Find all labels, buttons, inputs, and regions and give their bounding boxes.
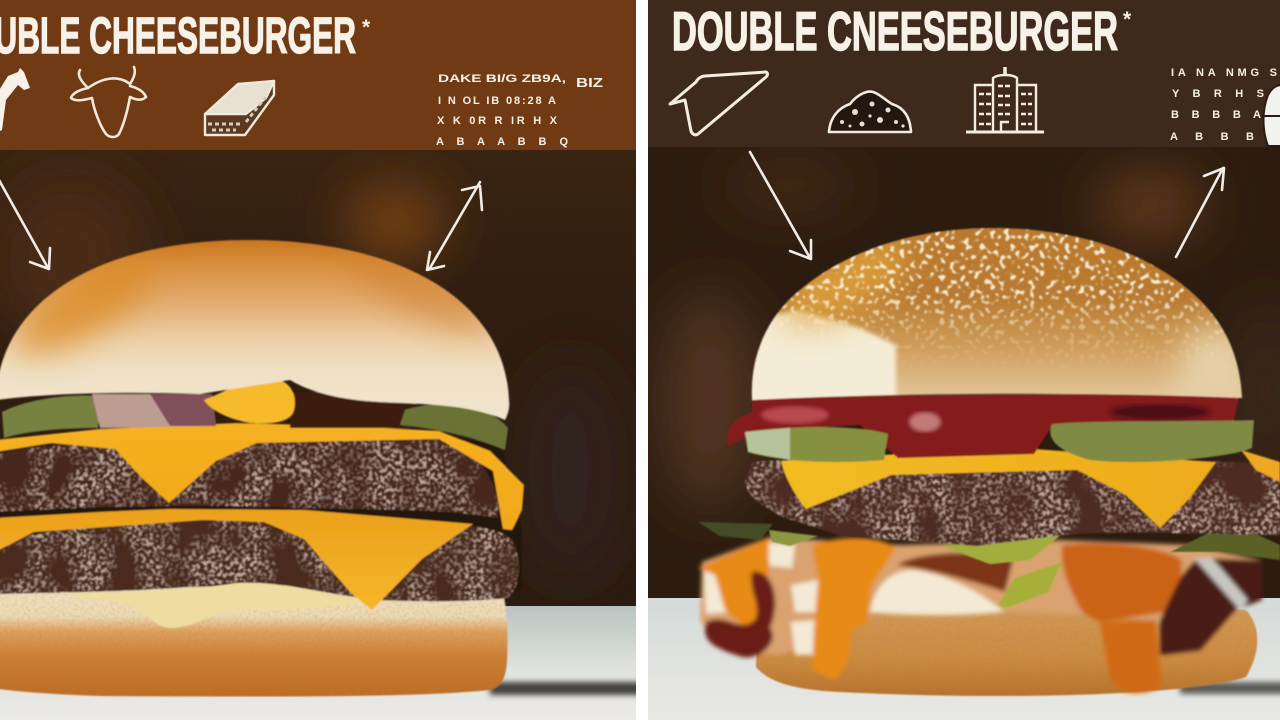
right small text table: IA NA NMG S	[1171, 67, 1277, 79]
right bottom bun	[756, 603, 1257, 696]
left lower cheese	[0, 509, 473, 610]
arrow: right panel up	[1176, 168, 1224, 257]
left background	[0, 150, 636, 620]
right sesame seeds	[740, 225, 1250, 405]
right cheese	[781, 449, 1216, 528]
left lower patty	[0, 520, 519, 601]
panel: left burger	[0, 0, 650, 720]
icon: bull head	[71, 67, 146, 137]
icon: cup at edge	[1262, 85, 1280, 146]
left header band	[0, 0, 636, 150]
left top bun	[0, 233, 509, 420]
panel divider	[636, 0, 648, 720]
right small text table: A B B B	[1170, 131, 1254, 143]
left small text table: X K 0R R IR H X	[437, 115, 558, 127]
left burger stack	[0, 233, 524, 696]
icon: cake slab	[205, 81, 274, 135]
right filling layer	[698, 537, 1262, 693]
right cream patches	[704, 542, 1004, 655]
left asterisk: *	[362, 16, 371, 39]
left small text table: DAKE BI/G ZB9A,	[438, 73, 566, 85]
arrow: right panel down	[750, 152, 811, 259]
left small text table: I N OL IB 08:28 A	[438, 95, 556, 107]
right table shadow	[1180, 682, 1280, 694]
arrow: left panel down	[0, 180, 50, 269]
right background	[648, 147, 1280, 607]
right patty	[745, 458, 1280, 546]
left dark shade between patties	[0, 440, 522, 598]
left small text table: BIZ	[576, 75, 603, 90]
left small text table	[436, 73, 603, 148]
icon: animal silhouette	[0, 68, 30, 132]
right bacon	[705, 572, 775, 657]
right header band	[648, 0, 1280, 147]
left cheese drop	[204, 378, 295, 423]
right onions	[1160, 558, 1262, 655]
right filling base	[700, 537, 1262, 655]
left pickle and onion	[2, 392, 508, 450]
right top bun	[745, 223, 1250, 405]
left sauce layer	[60, 583, 380, 628]
right asterisk: *	[1123, 8, 1132, 31]
right burger stack	[698, 223, 1280, 696]
right small text table	[1170, 67, 1277, 143]
right meat piece	[897, 553, 1013, 592]
right table	[648, 598, 1280, 720]
icon: buildings	[966, 67, 1044, 132]
left upper patty	[0, 439, 498, 518]
right pickles	[745, 420, 1254, 462]
left bottom bun	[0, 585, 507, 696]
right orange sauce	[1062, 543, 1182, 693]
right small text table: B B B B A	[1171, 109, 1261, 121]
left table	[0, 606, 650, 720]
left small text table: A B A A B B Q	[436, 136, 568, 148]
icon: paper plane	[670, 72, 768, 135]
right cheese side	[1241, 450, 1280, 482]
icon: mound	[829, 92, 911, 132]
right orange cheese drips	[698, 537, 896, 680]
right lettuce and pickles	[698, 522, 1280, 608]
right small text table: Y B R H S	[1172, 88, 1264, 100]
panel: right burger	[648, 0, 1280, 720]
right ketchup	[727, 393, 1240, 458]
arrow: left panel double	[427, 182, 482, 270]
left upper cheese	[0, 423, 524, 530]
